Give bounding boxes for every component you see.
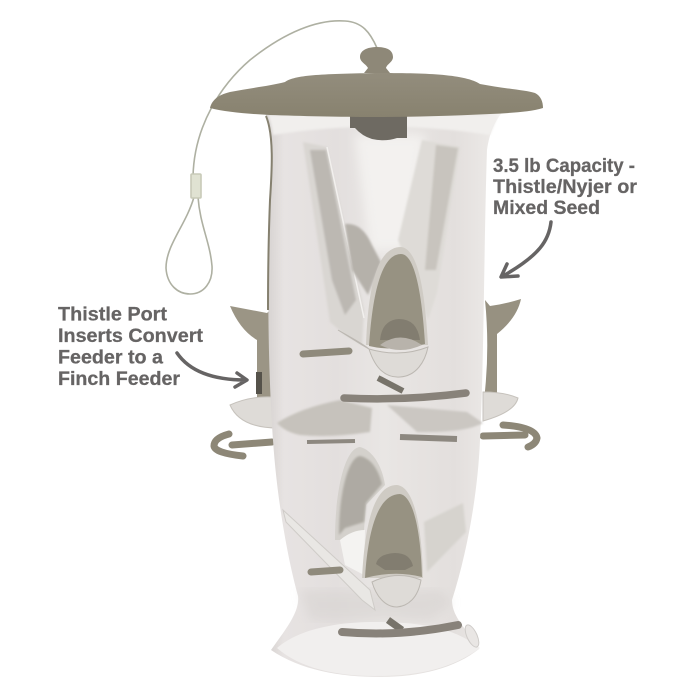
roof knob bbox=[360, 47, 393, 73]
perch: bottom bbox=[342, 625, 458, 633]
base clip bbox=[462, 623, 482, 649]
base light ring bbox=[277, 622, 480, 676]
label: capacity: 3.5 lb Capacity - bbox=[493, 156, 635, 177]
light centre column bbox=[355, 135, 425, 250]
side tab: left bbox=[230, 303, 278, 402]
hanging cable bbox=[166, 21, 377, 294]
label: thistle ports: Finch Feeder bbox=[58, 369, 181, 390]
serrated bar: left bbox=[307, 441, 355, 442]
serrated bar: right bbox=[400, 437, 457, 439]
label: capacity: Mixed Seed bbox=[493, 198, 600, 219]
hook: left bbox=[214, 434, 272, 456]
perch stem: lower bbox=[388, 620, 402, 630]
side dish: left bbox=[230, 397, 278, 428]
feeder bbox=[166, 21, 543, 677]
body left edge highlight bbox=[266, 116, 272, 310]
lower port bbox=[362, 485, 423, 607]
upper tube: right bbox=[398, 140, 460, 320]
upper tube: left bbox=[303, 142, 364, 345]
clamp: top hub bbox=[350, 116, 407, 140]
back port: lower bbox=[335, 447, 385, 575]
hook: right bbox=[483, 425, 537, 447]
label: thistle ports bbox=[58, 304, 204, 390]
side post shadow bbox=[256, 372, 262, 394]
perch stub: lower bbox=[311, 570, 340, 572]
perch stub: upper bbox=[303, 351, 349, 354]
seed tray: right bbox=[387, 405, 483, 432]
upper port bbox=[338, 247, 428, 377]
roof lid bbox=[210, 73, 543, 117]
perch: middle bbox=[344, 393, 466, 399]
lower tube: left bbox=[283, 510, 375, 610]
side dish: right bbox=[483, 392, 518, 421]
label: thistle ports: Inserts Convert bbox=[58, 326, 204, 347]
side tab: right bbox=[484, 299, 521, 400]
clear body bbox=[265, 113, 502, 677]
lower tube: right bbox=[424, 503, 466, 572]
label: capacity: Thistle/Nyjer or bbox=[493, 177, 638, 198]
arrow: capacity bbox=[501, 222, 551, 277]
soft shading bbox=[300, 590, 452, 620]
perch stem: middle bbox=[378, 378, 403, 391]
seed tray: left bbox=[277, 400, 372, 436]
label: thistle ports: Feeder to a bbox=[58, 348, 163, 368]
arrow: thistle ports bbox=[177, 353, 247, 387]
collar shade bbox=[268, 115, 498, 135]
label: thistle ports: Thistle Port bbox=[58, 304, 168, 326]
label: capacity bbox=[493, 156, 638, 219]
back port: upper bbox=[345, 224, 381, 295]
